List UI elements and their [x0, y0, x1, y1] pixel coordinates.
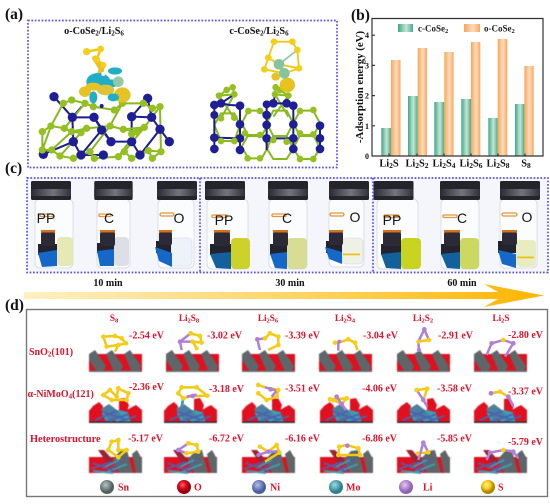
x-axis labels: 8	[527, 161, 531, 170]
energy values: -2.91 eV	[438, 330, 474, 342]
x-axis labels: S	[419, 158, 425, 170]
vial group 30 min	[205, 181, 369, 269]
panel frame a	[28, 20, 337, 168]
vial group 60 min	[374, 181, 540, 269]
energy values	[128, 330, 544, 448]
energy values: -6.72 eV	[209, 434, 245, 444]
row labels	[28, 347, 101, 445]
panel: adsorption energy bar chart	[354, 18, 543, 170]
energy values: -2.54 eV	[129, 330, 165, 342]
element legend	[100, 480, 504, 494]
x-axis labels: 6	[479, 161, 483, 170]
column headings: 6	[275, 318, 279, 324]
panel label (d): (d)	[5, 297, 24, 314]
x-axis labels: 2	[469, 161, 473, 170]
vial O 10 min	[155, 181, 197, 268]
photo background	[27, 178, 548, 272]
x-axis labels: Li	[459, 158, 469, 170]
x-axis labels: Li	[379, 158, 389, 170]
heading: c-CoSe2/Li2S6: 6	[285, 30, 289, 38]
chart legend: o-CoSe	[484, 24, 512, 34]
vial PP 30 min: PP	[215, 212, 233, 228]
row labels: α-NiMoO	[28, 389, 69, 400]
heading: c-CoSe2/Li2S6: S	[279, 26, 285, 37]
x-axis labels: S	[393, 158, 399, 170]
y-axis ticks: 0	[365, 152, 369, 161]
energy values: -5.17 eV	[128, 434, 164, 444]
panel label (a): (a)	[5, 6, 23, 23]
vial PP 60 min: PP	[383, 212, 401, 228]
panel frame c with dividers	[27, 178, 548, 272]
heading: c-CoSe2/Li2S6: /Li	[262, 26, 276, 37]
vial C 30 min	[268, 181, 308, 269]
energy values: -3.37 eV	[508, 386, 544, 398]
vial C 60 min: C	[457, 210, 467, 226]
heading: o-CoSe2/Li2S6: 2	[95, 30, 99, 38]
crystal structure: c-CoSe2 with Li2S6	[210, 38, 324, 162]
y-axis ticks	[365, 31, 369, 161]
column headings: S	[425, 313, 430, 323]
x-axis labels: 2	[389, 161, 393, 170]
column headings: S	[504, 313, 510, 323]
x-axis labels: 8	[506, 161, 510, 170]
y-axis ticks: 1	[365, 122, 369, 131]
slabs	[89, 350, 527, 473]
x-axis labels: S	[500, 158, 506, 170]
vial PP 10 min	[31, 181, 73, 268]
x-axis labels: S	[446, 158, 452, 170]
x-axis labels: 2	[425, 161, 429, 170]
time label 30 min: 30 min	[275, 278, 305, 289]
panel frame d	[26, 310, 548, 496]
time label 10 min: 10 min	[93, 278, 123, 289]
adsorbed molecules right columns	[328, 327, 518, 460]
column headings: 4	[352, 318, 356, 324]
energy values: -3.58 eV	[437, 384, 473, 394]
column headings	[110, 313, 510, 324]
energy values: -3.51 eV	[285, 384, 321, 394]
element legend: O	[194, 482, 202, 494]
x-axis labels: 2	[496, 161, 500, 170]
y-axis ticks: 4	[365, 31, 369, 40]
vial O 10 min: O	[174, 210, 185, 226]
energy values: -5.79 eV	[508, 437, 544, 448]
row labels: (101)	[51, 347, 73, 358]
x-axis labels: S	[473, 158, 479, 170]
arrow: time progression	[24, 284, 544, 307]
column headings: 2	[422, 318, 425, 324]
x-axis labels: Li	[432, 158, 442, 170]
panel label (b): (b)	[351, 7, 370, 24]
energy values: -6.16 eV	[285, 434, 321, 444]
heading: o-CoSe2/Li2S6: S	[115, 26, 121, 37]
vial O 60 min	[498, 181, 540, 268]
energy values: -6.86 eV	[362, 434, 398, 444]
chart legend: 2	[445, 28, 448, 35]
x-axis labels: S	[521, 158, 527, 170]
vial C 10 min	[94, 181, 133, 268]
vial group 10 min	[31, 181, 197, 268]
vial C 10 min: C	[104, 210, 114, 226]
vial O 60 min: O	[522, 209, 533, 225]
x-axis labels: Li	[486, 158, 496, 170]
heading: o-CoSe2/Li2S6: 2	[111, 30, 115, 38]
heading: c-CoSe2/Li2S6: 2	[260, 30, 264, 38]
y-axis ticks: 2	[365, 92, 369, 100]
column headings: Li	[179, 313, 188, 323]
column headings: 2	[430, 318, 433, 324]
row labels: (121)	[72, 389, 94, 400]
column headings: S	[347, 313, 352, 323]
column headings: 2	[188, 318, 191, 324]
column headings: 2	[501, 318, 504, 324]
heading: o-CoSe2/Li2S6: /Li	[98, 26, 111, 37]
x-axis labels: 2	[415, 161, 419, 170]
vial O 30 min	[325, 181, 369, 267]
vial C 30 min: C	[282, 210, 292, 226]
energy values: -5.85 eV	[437, 434, 473, 444]
element legend: Mo	[346, 482, 360, 494]
heading: c-CoSe2/Li2S6: c-CoSe	[229, 26, 260, 37]
element legend: Sn	[118, 482, 130, 494]
time label 60 min: 60 min	[447, 278, 477, 289]
heading: c-CoSe2/Li2S6: 2	[276, 30, 280, 38]
column headings: S	[191, 313, 196, 323]
column headings: 2	[267, 318, 270, 324]
element legend: S	[498, 482, 504, 494]
x-axis labels: Li	[405, 158, 415, 170]
energy values: -4.06 eV	[362, 384, 398, 394]
x-axis labels	[379, 158, 531, 170]
column headings: 8	[196, 318, 200, 324]
chart legend: 2	[512, 28, 515, 35]
column headings: Li	[492, 313, 501, 323]
x-axis labels: 4	[452, 161, 456, 170]
vial O 30 min: O	[350, 209, 361, 225]
column headings: Li	[258, 313, 267, 323]
column headings: S	[270, 313, 275, 323]
element legend: Ni	[270, 482, 280, 494]
vial PP 30 min	[205, 181, 250, 269]
panel: vial photographs	[27, 178, 548, 272]
panel: charge density structures	[28, 20, 337, 168]
vial PP 60 min	[374, 181, 421, 269]
vial PP 10 min: PP	[37, 210, 55, 226]
element legend: Li	[423, 482, 433, 494]
row labels: 4	[69, 392, 73, 400]
x-axis labels: 2	[442, 161, 446, 170]
column headings: Li	[413, 313, 422, 323]
chart legend: c-CoSe	[418, 24, 445, 34]
energy values: -3.18 eV	[209, 384, 245, 395]
column headings: Li	[335, 313, 344, 323]
energy values: -3.39 eV	[285, 330, 321, 342]
energy values: -3.02 eV	[207, 330, 243, 342]
energy values: -3.04 eV	[363, 330, 399, 342]
panel label (c): (c)	[5, 160, 22, 177]
column headings: S	[110, 313, 115, 323]
panel: calculated adsorption energies	[26, 310, 548, 496]
crystal structure: o-CoSe2 with charge density	[39, 46, 174, 162]
chart axes	[372, 18, 543, 156]
row labels: SnO	[29, 347, 48, 358]
heading: o-CoSe2/Li2S6: 6	[120, 30, 124, 38]
bars	[381, 39, 534, 156]
y-axis ticks: 3	[365, 62, 369, 70]
chart legend	[398, 24, 515, 35]
row labels: 2	[48, 350, 52, 358]
heading: o-CoSe2/Li2S6: o-CoSe	[64, 26, 95, 37]
vial C 60 min	[440, 181, 480, 269]
y-axis title: -Adsorption energy (eV)	[354, 31, 366, 143]
column headings: 2	[344, 318, 347, 324]
energy values: -2.36 eV	[129, 382, 165, 393]
column headings: 8	[115, 318, 119, 324]
energy values: -2.80 eV	[508, 330, 544, 341]
row labels: Heterostructure	[30, 434, 101, 445]
adsorbed molecules left columns	[101, 331, 282, 462]
